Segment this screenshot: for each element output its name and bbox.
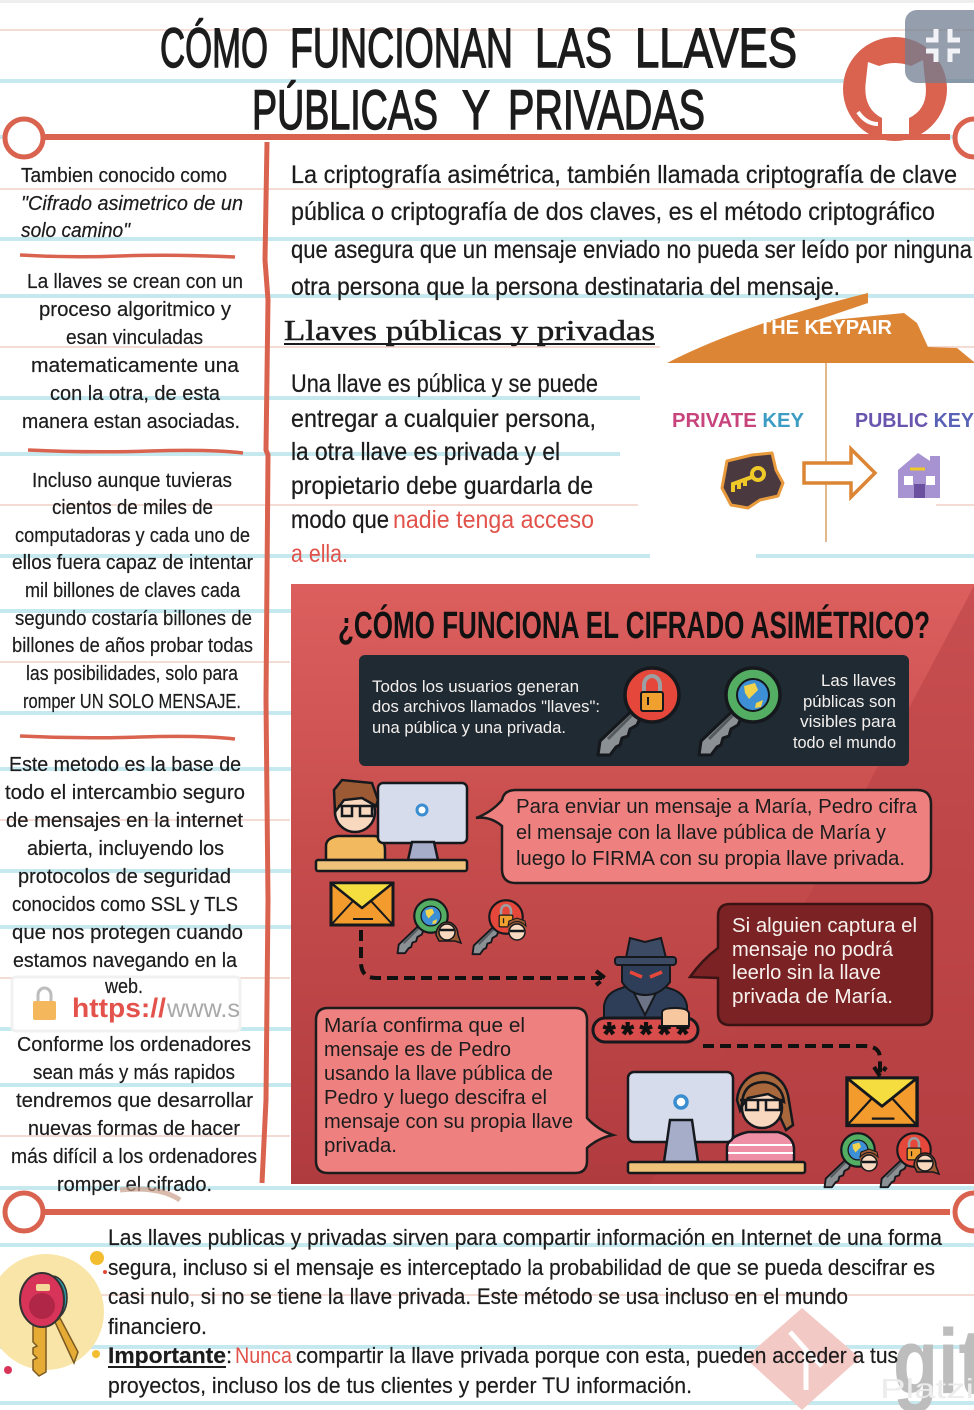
speech bubble: Pedro <box>476 790 931 883</box>
closing paragraph: financiero. <box>108 1314 207 1339</box>
bottom divider rule with circles <box>5 1193 974 1231</box>
text block: base of secure exchange: estamos navegando en la <box>13 950 238 972</box>
https address bar: https:// <box>72 993 167 1023</box>
text block: computing power: cientos de miles de <box>52 497 213 519</box>
title: Y <box>462 78 490 141</box>
title: PÚBLICAS <box>252 78 438 141</box>
envelope: received message <box>847 1078 917 1125</box>
text block: faster computers: tendremos que desarrollar <box>16 1090 253 1112</box>
https address bar: www.s <box>166 995 240 1023</box>
watermark: git logo: Platzi <box>880 1373 974 1404</box>
text block: algorithmic process: con la otra, de esta <box>50 383 221 405</box>
dark box: key generation: todo el mundo <box>793 733 896 752</box>
text block: algorithmic process: matematicamente una <box>31 355 240 377</box>
speech bubble: Maria: usando la llave pública de <box>324 1063 553 1085</box>
envelope: sent message <box>331 883 393 925</box>
text block: computing power: Incluso aunque tuvieras <box>32 470 232 492</box>
icon: key ring <box>0 1251 107 1376</box>
paragraph: public and private: entregar a cualquier persona, <box>291 405 596 433</box>
vertical divider <box>262 142 268 1183</box>
dark box: key generation: Todos los usuarios generan <box>372 677 579 696</box>
top divider rule with circles <box>5 119 974 157</box>
paragraph: public and private: a ella. <box>291 540 348 568</box>
https address bar <box>12 977 240 1031</box>
speech bubble: Maria: María confirma que el <box>324 1015 525 1037</box>
speech bubble: Maria <box>316 1008 613 1173</box>
paragraph: public and private: nadie tenga acceso <box>393 506 594 534</box>
dark box: key generation: Las llaves <box>821 671 896 690</box>
intro paragraph <box>291 161 972 301</box>
closing paragraph: segura, incluso si el mensaje es interceptado la probabilidad de que se pueda descifrar es <box>108 1255 935 1280</box>
watermark: git logo <box>745 1308 974 1410</box>
speech bubble: hacker: privada de María. <box>732 986 893 1008</box>
illustration: hacker: ***** <box>603 1016 690 1052</box>
icon: public key house <box>898 453 940 498</box>
illustration: Pedro at computer <box>316 780 467 871</box>
text block: faster computers: más difícil a los ordenadores <box>11 1146 257 1168</box>
illustration: hacker <box>593 938 698 1052</box>
label: private key: PRIVATE KEY <box>672 410 805 432</box>
dashed arrow: to Maria <box>703 1046 886 1076</box>
left column text: web. <box>104 976 143 998</box>
text block: faster computers: Conforme los ordenadores <box>17 1034 251 1056</box>
text block: faster computers: sean más y más rapidos <box>33 1062 235 1084</box>
text block: faster computers: romper el cifrado. <box>57 1174 212 1196</box>
text block: algorithmic process: esan vinculadas <box>66 327 203 349</box>
warning line: compartir la llave privada porque con esta, pueden acceder a tus <box>296 1343 898 1368</box>
dark box: key generation: una pública y una privada. <box>372 718 566 737</box>
keypair banner <box>667 293 974 363</box>
text block: computing power: segundo costaría billones de <box>15 608 252 630</box>
title: FUNCIONAN <box>290 16 513 79</box>
speech bubble: Pedro: el mensaje con la llave pública de María y <box>516 822 886 844</box>
intro paragraph: pública o criptografía de dos claves, es el método criptográfico <box>291 198 935 226</box>
paragraph: public and private: la otra llave es privada y el <box>291 438 560 466</box>
speech bubble: hacker: leerlo sin la llave <box>732 962 881 984</box>
arrow <box>804 449 875 497</box>
text block: base of secure exchange: protocolos de seguridad <box>18 866 231 888</box>
keys: Maria public key and Pedro private key <box>398 899 526 954</box>
text block: also known as: "Cifrado asimetrico de un <box>21 193 243 215</box>
icon: private key badge <box>722 453 783 508</box>
keypair banner: THE KEYPAIR <box>759 317 893 339</box>
left column text <box>5 165 257 1196</box>
dark box: key generation: públicas son <box>803 692 896 711</box>
title: LAS <box>535 16 612 79</box>
label: public key: PUBLIC KEY <box>855 410 974 432</box>
paragraph: public and private: Una llave es pública y se puede <box>291 370 598 398</box>
text block: faster computers <box>11 1034 257 1196</box>
title: PRIVADAS <box>508 78 705 141</box>
paragraph: public and private <box>291 370 598 568</box>
heading: llaves publicas y privadas: Llaves públicas y privadas <box>284 316 655 347</box>
expand icon overlay <box>905 10 974 83</box>
closing paragraph: Las llaves publicas y privadas sirven para compartir información en Internet de una forma <box>108 1225 943 1250</box>
closing paragraph: casi nulo, si no se tiene la llave privada. Este método se usa incluso en el mundo <box>108 1284 848 1309</box>
speech bubble: hacker: Si alguien captura el <box>732 915 917 937</box>
speech bubble: hacker <box>690 904 932 1025</box>
text block: base of secure exchange: conocidos como SSL y TLS <box>12 894 238 916</box>
warning line: Importante <box>108 1343 226 1368</box>
closing paragraph <box>108 1225 943 1398</box>
speech bubble: hacker: mensaje no podrá <box>732 939 894 961</box>
text block: faster computers: nuevas formas de hacer <box>28 1118 240 1140</box>
text block: base of secure exchange: abierta, incluyendo los <box>27 838 224 860</box>
text block: also known as: Tambien conocido como <box>21 165 227 187</box>
illustration: Maria at computer <box>628 1072 805 1173</box>
speech bubble: Maria: mensaje con su propia llave <box>324 1111 573 1133</box>
text block: base of secure exchange: de mensajes en la internet <box>6 810 243 832</box>
text block: algorithmic process: La llaves se crean con un <box>27 271 243 293</box>
text block: also known as: solo camino" <box>21 220 131 242</box>
text block: computing power: las posibilidades, solo para <box>26 663 239 685</box>
text block: base of secure exchange: Este metodo es la base de <box>9 754 241 776</box>
text block: computing power: ellos fuera capaz de intentar <box>12 552 253 574</box>
paragraph: public and private: propietario debe guardarla de <box>291 472 593 500</box>
text block: computing power: billones de años probar todas <box>12 635 253 657</box>
text block: computing power: computadoras y cada uno de <box>15 525 250 547</box>
warning line: Nunca <box>235 1343 293 1368</box>
text block: algorithmic process: proceso algoritmico y <box>39 299 231 321</box>
speech bubble: Pedro: Para enviar un mensaje a María, Pedro cifra <box>516 796 918 818</box>
dashed arrow: intercepted <box>361 930 605 985</box>
text block: algorithmic process: manera estan asociadas. <box>22 411 240 433</box>
speech bubble: Maria: privada. <box>324 1135 397 1157</box>
text block: computing power: romper UN SOLO MENSAJE. <box>23 691 241 713</box>
text block: computing power <box>12 470 253 713</box>
diagram: the keypair <box>667 293 974 542</box>
title: LLAVES <box>635 16 797 79</box>
icon: github logo <box>843 37 947 141</box>
closing paragraph: proyectos, incluso los de tus clientes y perder TU información. <box>108 1373 692 1398</box>
paragraph: public and private: modo que <box>291 506 389 534</box>
dark box: key generation: visibles para <box>800 712 897 731</box>
text block: also known as <box>21 165 243 242</box>
text block: algorithmic process <box>22 271 243 433</box>
text block: base of secure exchange <box>5 754 245 972</box>
text block: base of secure exchange: todo el intercambio seguro <box>5 782 245 804</box>
keys: Pedro public key and Maria private key <box>825 1133 939 1187</box>
dark box: key generation: dos archivos llamados "llaves": <box>372 697 600 716</box>
dark box: key generation <box>359 655 909 766</box>
title: CÓMO <box>160 16 268 79</box>
panel: how asymmetric encryption works <box>291 584 974 1187</box>
text block: computing power: mil billones de claves cada <box>25 580 241 602</box>
speech bubble: Maria: mensaje es de Pedro <box>324 1039 511 1061</box>
title <box>160 16 797 141</box>
text block: base of secure exchange: que nos protegen cuando <box>12 922 243 944</box>
speech bubble: Maria: Pedro y luego descifra el <box>324 1087 547 1109</box>
warning line: : <box>226 1343 232 1368</box>
speech bubble: Pedro: luego lo FIRMA con su propia llave privada. <box>516 848 905 870</box>
intro paragraph: otra persona que la persona destinataria del mensaje. <box>291 273 840 301</box>
